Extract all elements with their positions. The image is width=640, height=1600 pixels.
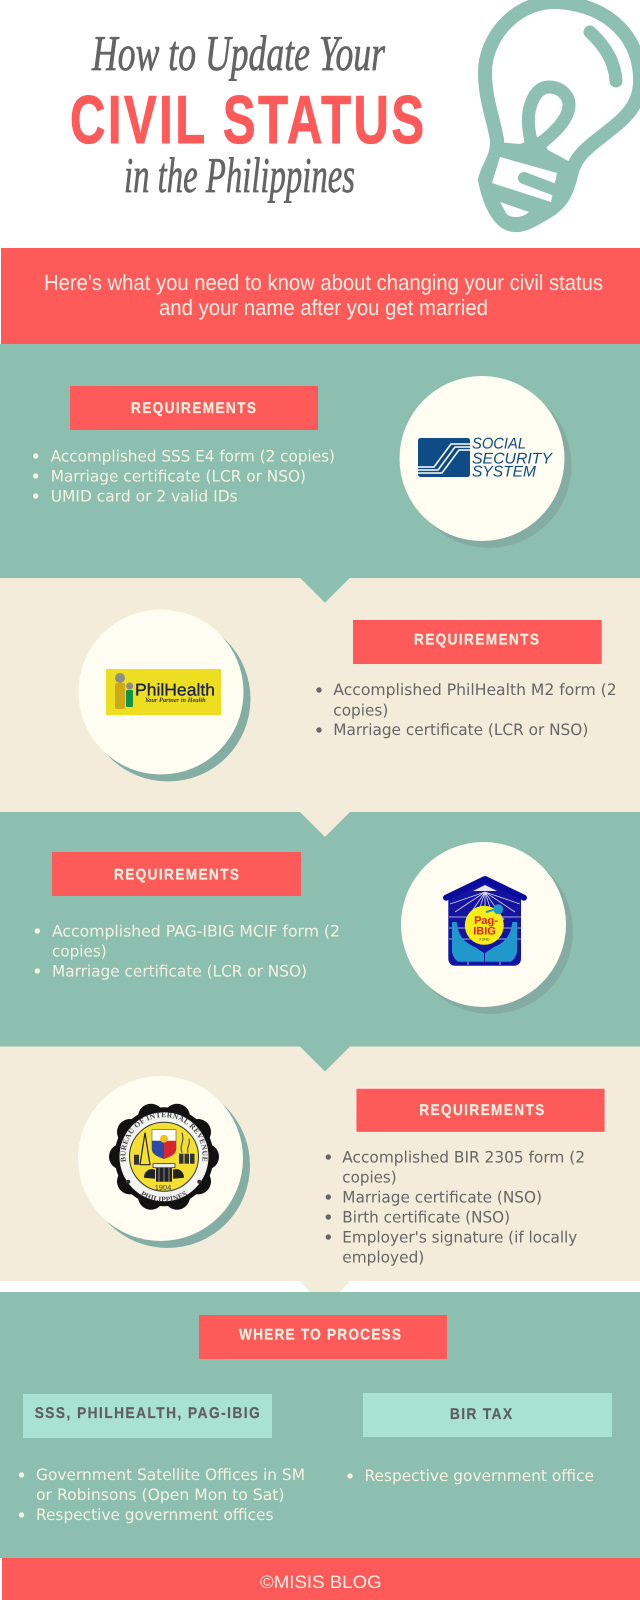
logo circle: Pag-IBIG fund: FUND: [480, 938, 490, 942]
list: PhilHealth requirements: [316, 680, 617, 739]
button: BIR tax: [363, 1393, 612, 1437]
panel: SSS: [0, 344, 640, 578]
list: government offices: [19, 1465, 305, 1524]
list: Pag-IBIG requirements: Marriage certificate (LCR or NSO): [52, 962, 307, 981]
list: BIR requirements: copies): [342, 1167, 397, 1186]
subheading banner: and your name after you get married: [159, 295, 488, 320]
button: SSS, PhilHealth, Pag-IBIG: SSS, PHILHEALTH, PAG-IBIG: [35, 1405, 260, 1422]
button: requirements: [70, 386, 318, 430]
title line: in the Philippines: in the Philippines: [124, 147, 355, 203]
button: requirements: REQUIREMENTS: [131, 400, 256, 417]
logo circle: Bureau of Internal Revenue seal: PHILIPPINES: [140, 1190, 187, 1202]
button: requirements: [353, 620, 602, 664]
logo circle: Bureau of Internal Revenue seal: 1904: [155, 1183, 171, 1192]
logo circle: Bureau of Internal Revenue seal: BUREAU OF INTERNAL REVENUE: [120, 1112, 208, 1162]
list: PhilHealth requirements: Accomplished PhilHealth M2 form (2: [333, 680, 617, 699]
list: Pag-IBIG requirements: [35, 922, 340, 981]
list: government offices: Government Satellite Offices in SM: [36, 1465, 305, 1484]
button: where to process: WHERE TO PROCESS: [239, 1326, 401, 1343]
logo circle: Social Security System: SECURITY: [472, 450, 554, 467]
list: BIR requirements: Birth certificate (NSO): [342, 1207, 510, 1226]
list: SSS requirements: [33, 447, 335, 506]
button: where to process: [199, 1315, 447, 1359]
list: Pag-IBIG requirements: copies): [52, 942, 107, 961]
panel: BIR: [0, 1046, 640, 1281]
button: requirements: REQUIREMENTS: [114, 866, 239, 883]
list: SSS requirements: UMID card or 2 valid IDs: [51, 487, 238, 506]
list: BIR requirements: employed): [342, 1247, 424, 1266]
panel: PhilHealth: [0, 578, 640, 812]
logo circle: Pag-IBIG fund: Pag-: [474, 915, 498, 927]
list: BIR office: Respective government office: [364, 1466, 594, 1485]
logo circle: Pag-IBIG fund: [401, 842, 573, 1014]
footer: ©MISIS BLOG: [260, 1572, 382, 1592]
subheading banner: [1, 248, 640, 344]
button: BIR tax: BIR TAX: [450, 1406, 513, 1423]
list: government offices: Respective government offices: [36, 1505, 274, 1524]
logo circle: Bureau of Internal Revenue seal: [78, 1076, 250, 1248]
arrow: teal down pointer: [300, 1046, 350, 1072]
header: title and bulb: [70, 2, 640, 225]
button: requirements: [356, 1088, 605, 1132]
button: SSS, PhilHealth, Pag-IBIG: [23, 1394, 272, 1438]
list: BIR requirements: Marriage certificate (NSO): [342, 1187, 542, 1206]
button: requirements: [52, 852, 301, 896]
arrow: teal down pointer: [300, 578, 350, 603]
logo circle: PhilHealth: Your Partner in Health: [145, 697, 206, 704]
list: BIR requirements: Accomplished BIR 2305 form (2: [342, 1147, 585, 1166]
logo circle: Social Security System: [400, 376, 572, 548]
panel: Pag-IBIG: [0, 812, 640, 1046]
arrow: beige down pointer: [300, 812, 350, 837]
logo circle: PhilHealth: [78, 610, 250, 782]
list: BIR requirements: Employer's signature (if locally: [342, 1227, 577, 1246]
list: government offices: or Robinsons (Open Mon to Sat): [36, 1485, 284, 1504]
logo circle: Social Security System: SYSTEM: [472, 464, 536, 481]
logo circle: PhilHealth: PhilHealth: [135, 680, 215, 699]
logo circle: Social Security System: SOCIAL: [472, 435, 526, 452]
title line: How to Update Your: How to Update Your: [91, 25, 385, 81]
panel: where to process: [0, 1292, 640, 1558]
list: SSS requirements: Accomplished SSS E4 form (2 copies): [51, 447, 335, 466]
title line: CIVIL STATUS: CIVIL STATUS: [70, 82, 424, 158]
list: BIR requirements: [326, 1147, 585, 1266]
list: PhilHealth requirements: Marriage certificate (LCR or NSO): [333, 720, 588, 739]
button: requirements: REQUIREMENTS: [414, 632, 539, 649]
icon: light bulb: [485, 2, 640, 225]
subheading banner: Here's what you need to know about changing your civil status: [44, 270, 603, 295]
list: Pag-IBIG requirements: Accomplished PAG-IBIG MCIF form (2: [52, 922, 340, 941]
logo circle: Pag-IBIG fund: IBIG: [473, 925, 496, 937]
list: PhilHealth requirements: copies): [333, 700, 388, 719]
footer: [2, 1558, 640, 1600]
list: SSS requirements: Marriage certificate (LCR or NSO): [51, 467, 306, 486]
button: requirements: REQUIREMENTS: [419, 1102, 544, 1119]
connector: beige stub under panel: [300, 1281, 350, 1292]
